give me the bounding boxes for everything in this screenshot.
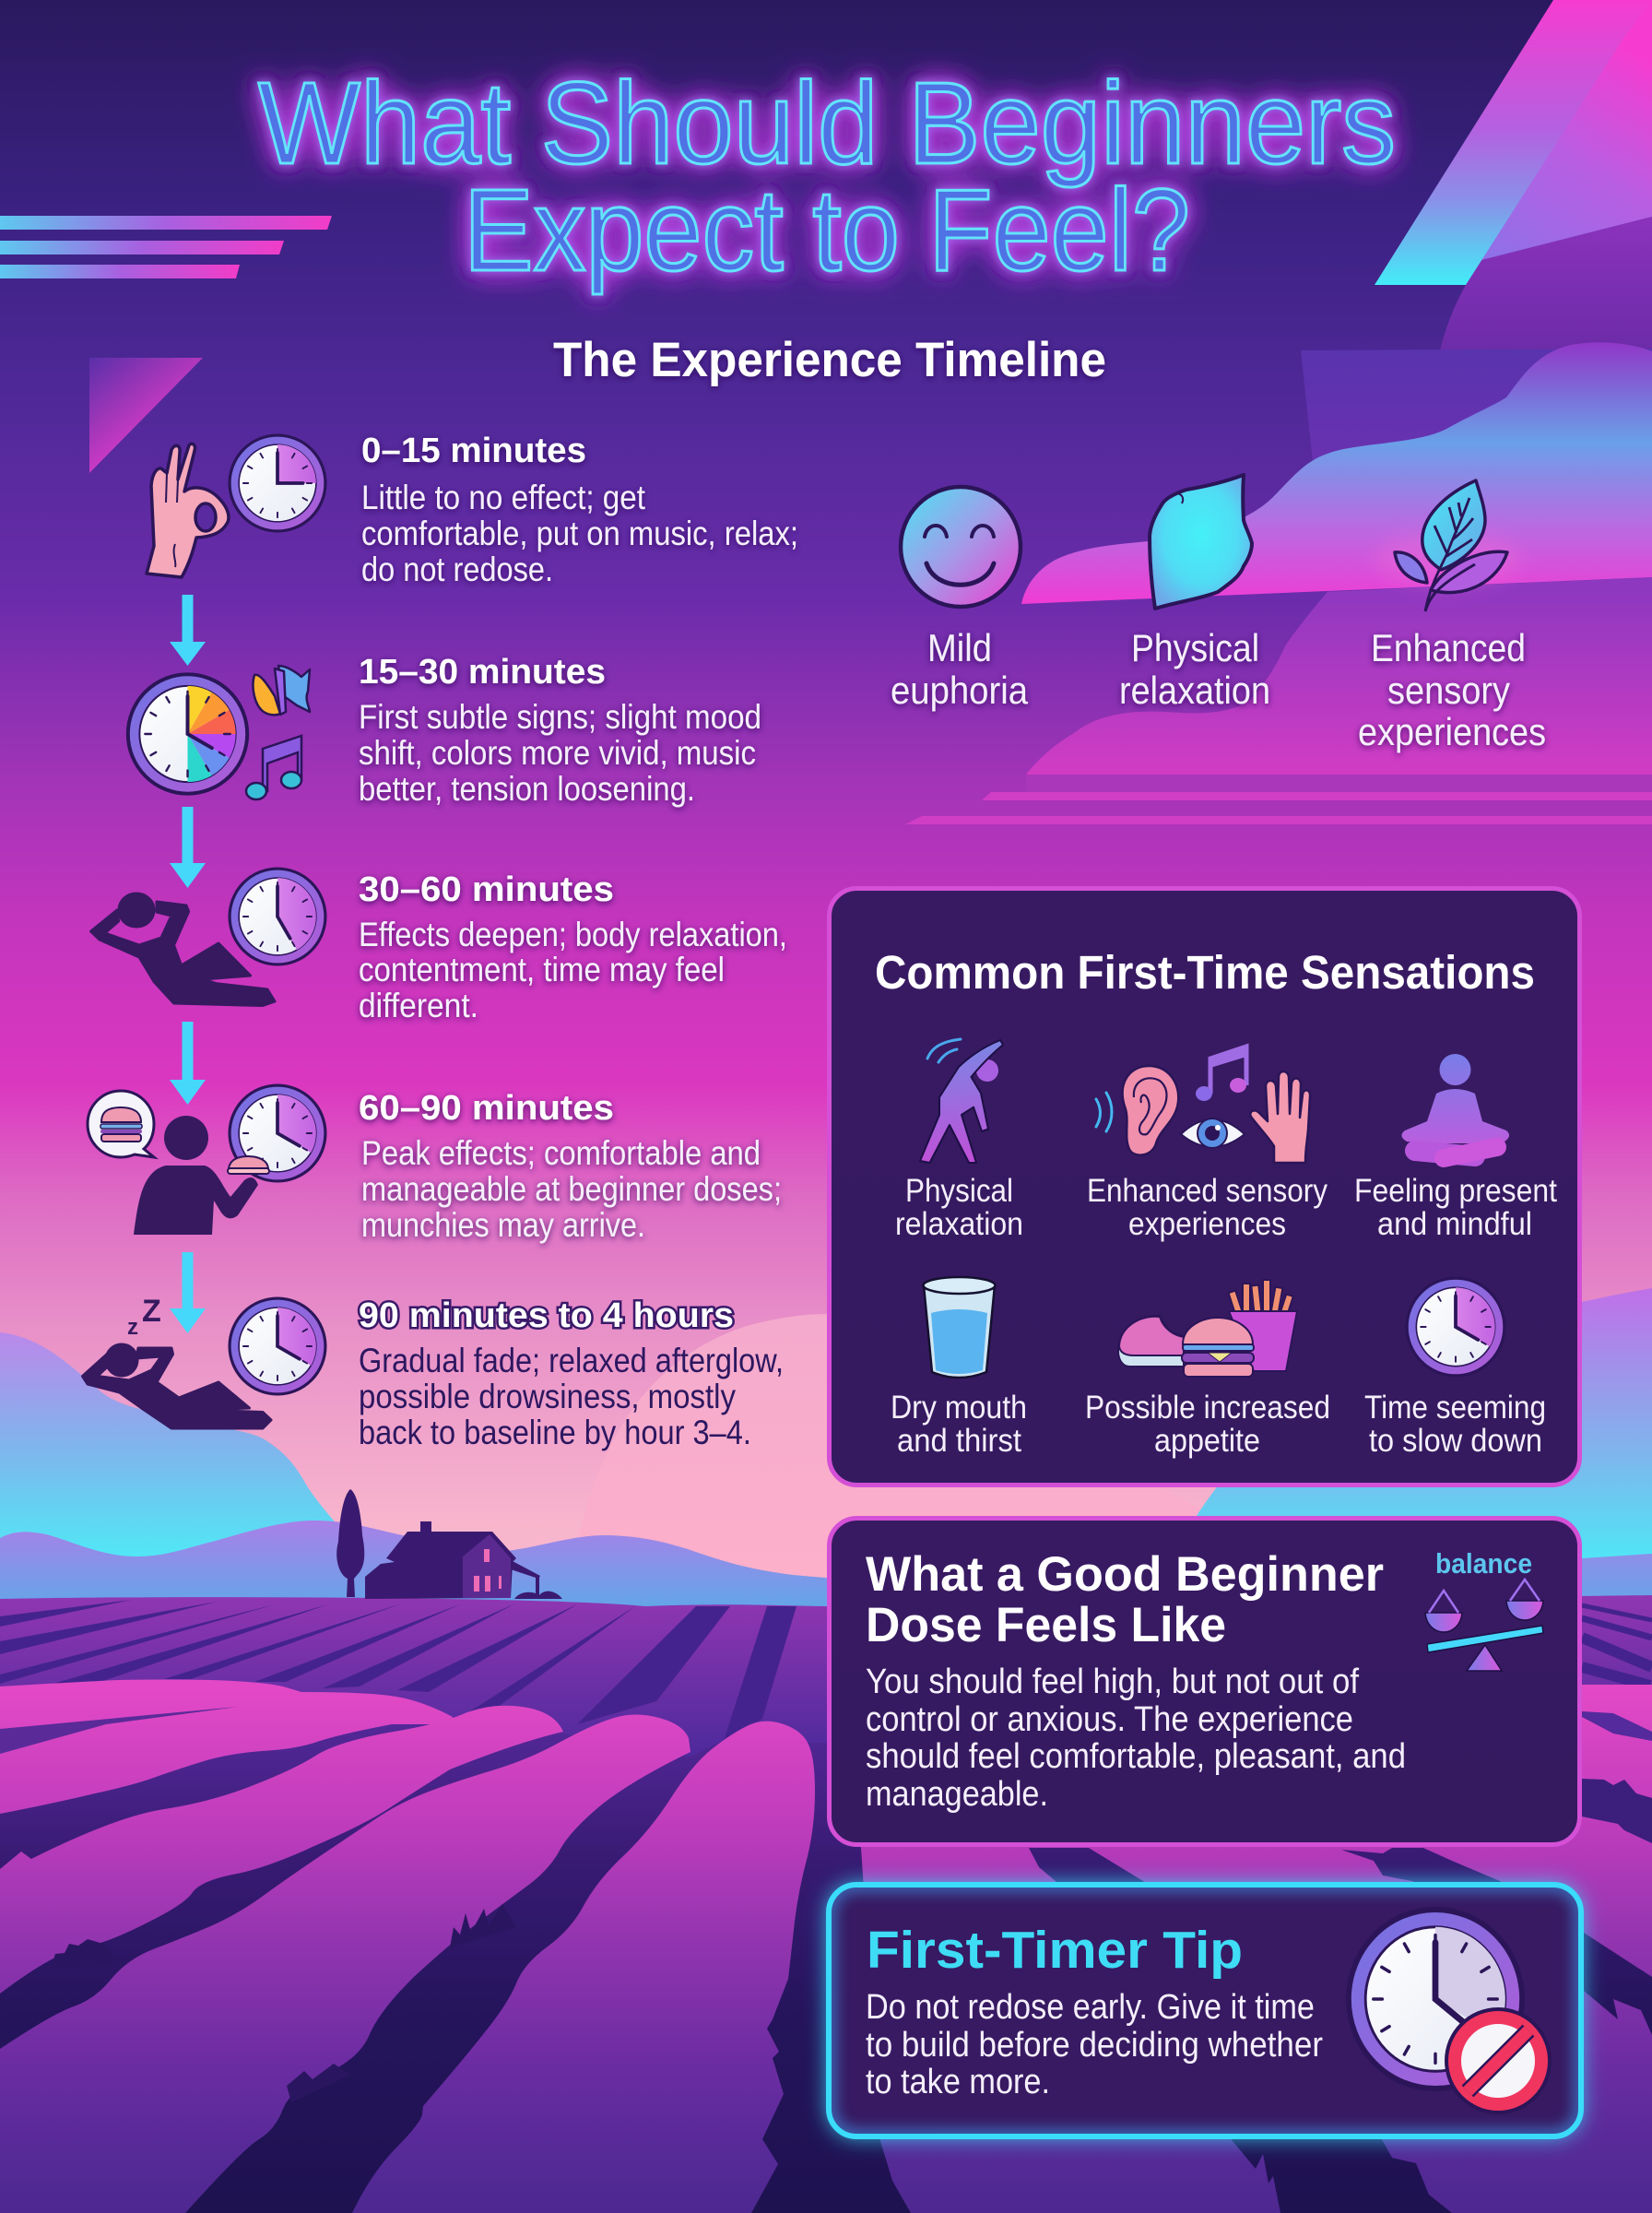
sensation labels row 2: Possible increased bbox=[1085, 1390, 1330, 1426]
effect labels: relaxation bbox=[1119, 669, 1270, 712]
icon: balance scale bbox=[1425, 1580, 1543, 1671]
timeline step 3 text bbox=[359, 870, 787, 1024]
icon: person at peak bbox=[134, 1116, 258, 1235]
icon: clock 90+ bbox=[230, 1298, 325, 1394]
timeline step 5 icons bbox=[83, 1294, 325, 1428]
effect labels: Enhanced bbox=[1371, 626, 1526, 669]
icon: ok hand bbox=[147, 444, 229, 577]
effect labels: Physical bbox=[1131, 626, 1259, 669]
panel heading: First-Timer Tip bbox=[867, 1921, 1243, 1980]
icon: smiley bbox=[901, 487, 1021, 607]
panel body: You should feel high, but not out of bbox=[866, 1663, 1359, 1701]
timeline step 2 text: First subtle signs; slight mood bbox=[359, 698, 761, 736]
sensation labels row 2: Dry mouth bbox=[891, 1390, 1027, 1426]
timeline step 2 text bbox=[359, 653, 761, 808]
sensation labels row 1: Physical bbox=[905, 1173, 1013, 1209]
panel heading: Dose Feels Like bbox=[866, 1598, 1226, 1652]
arrow 3 bbox=[170, 1022, 206, 1105]
timeline step 2 text: better, tension loosening. bbox=[359, 770, 695, 808]
icon: senses bbox=[1096, 1046, 1310, 1163]
icon: zZ: z bbox=[127, 1315, 138, 1340]
effect labels: euphoria bbox=[891, 669, 1029, 712]
timeline step 4 icons bbox=[88, 1085, 325, 1235]
effect labels bbox=[891, 626, 1546, 753]
title bbox=[258, 58, 1396, 295]
icon: clock 0-15 bbox=[230, 435, 325, 531]
arrow 4 bbox=[170, 1252, 206, 1333]
sensation labels row 2: Time seeming bbox=[1364, 1390, 1546, 1426]
icon: clock 30-60 bbox=[230, 869, 325, 964]
title: What Should Beginners bbox=[258, 58, 1396, 188]
sensation labels row 1: Feeling present bbox=[1354, 1173, 1557, 1209]
timeline step 5 text: back to baseline by hour 3–4. bbox=[359, 1414, 751, 1451]
heading: The Experience Timeline: The Experience Timeline bbox=[553, 333, 1106, 387]
timeline step 3 icons bbox=[91, 869, 325, 1005]
panel heading: Common First-Time Sensations bbox=[875, 946, 1535, 999]
timeline step 1 icons bbox=[147, 435, 325, 577]
timeline step 4 text bbox=[359, 1089, 782, 1244]
sensation labels row 1 bbox=[895, 1173, 1557, 1242]
timeline step 4 text: munchies may arrive. bbox=[361, 1206, 645, 1244]
illustration: tree and farmhouse bbox=[336, 1489, 562, 1599]
title: Expect to Feel? bbox=[464, 165, 1190, 295]
effect labels: experiences bbox=[1358, 710, 1546, 753]
timeline step 3 text: Effects deepen; body relaxation, bbox=[359, 916, 787, 953]
icon: zZ: Z bbox=[142, 1294, 161, 1329]
sensation labels row 1: experiences bbox=[1128, 1206, 1286, 1242]
label: balance: balance bbox=[1435, 1547, 1532, 1580]
arrow 1 bbox=[170, 595, 206, 666]
panel heading: What a Good Beginner bbox=[866, 1547, 1384, 1602]
icon: stretching person bbox=[920, 1039, 1003, 1163]
icon: glass of water bbox=[924, 1277, 996, 1378]
timeline step 5 text: possible drowsiness, mostly bbox=[359, 1378, 736, 1415]
sensation labels row 2: appetite bbox=[1154, 1423, 1260, 1459]
icon: food bbox=[1118, 1280, 1297, 1377]
panel body: to take more. bbox=[866, 2063, 1050, 2101]
icon: music notes bbox=[246, 736, 301, 799]
timeline step 4 text: 60–90 minutes bbox=[359, 1089, 614, 1128]
sensation labels row 2: to slow down bbox=[1369, 1423, 1542, 1459]
panel body: should feel comfortable, pleasant, and bbox=[866, 1737, 1406, 1776]
timeline step 1 text: do not redose. bbox=[361, 550, 553, 588]
background: hills, sunset mounds bbox=[0, 1288, 1652, 1623]
timeline step 5 text: Gradual fade; relaxed afterglow, bbox=[359, 1342, 784, 1379]
panel heading bbox=[866, 1547, 1384, 1652]
panel body: manageable. bbox=[866, 1775, 1048, 1814]
panel body bbox=[866, 1988, 1323, 2101]
timeline step 1 text bbox=[361, 432, 798, 588]
icon: colorful clock bbox=[128, 674, 247, 794]
panel: Common First-Time Sensations bbox=[830, 889, 1580, 1485]
sensation labels row 1: relaxation bbox=[895, 1206, 1023, 1242]
effect labels: sensory bbox=[1387, 669, 1510, 712]
timeline step 3 text: 30–60 minutes bbox=[359, 870, 614, 909]
panel: First-Timer Tip bbox=[829, 1885, 1581, 2136]
panel body: to build before deciding whether bbox=[866, 2026, 1323, 2065]
panel body: Do not redose early. Give it time bbox=[866, 1988, 1315, 2027]
timeline step 2 icons bbox=[128, 666, 310, 799]
icon: zZ bbox=[127, 1294, 161, 1340]
sensation labels row 2: and thirst bbox=[897, 1423, 1021, 1459]
timeline step 4 text: manageable at beginner doses; bbox=[361, 1170, 782, 1208]
sensation labels row 1: Enhanced sensory bbox=[1087, 1173, 1328, 1209]
timeline step 1 text: Little to no effect; get bbox=[361, 479, 646, 516]
timeline step 3 text: different. bbox=[359, 987, 478, 1024]
sensation labels row 1: and mindful bbox=[1377, 1206, 1532, 1242]
icon: speech bubble with burger bbox=[88, 1091, 154, 1157]
timeline step 1 text: 0–15 minutes bbox=[361, 432, 586, 470]
icon: meditating person bbox=[1401, 1054, 1509, 1158]
timeline step 5 text bbox=[359, 1296, 784, 1451]
effect labels: Mild bbox=[927, 626, 992, 669]
timeline step 2 text: 15–30 minutes bbox=[359, 653, 606, 692]
illustration: foreground lavender rows bbox=[0, 1680, 1652, 2213]
effects row bbox=[891, 475, 1546, 753]
icon: leaf bbox=[1375, 480, 1522, 611]
panel body bbox=[866, 1663, 1406, 1814]
illustration: distant lavender field bbox=[0, 1595, 1652, 1780]
icon: clock bbox=[1407, 1278, 1504, 1376]
panel body: control or anxious. The experience bbox=[866, 1700, 1353, 1739]
timeline step 2 text: shift, colors more vivid, music bbox=[359, 734, 756, 772]
icon: clock 60-90 bbox=[230, 1085, 325, 1181]
timeline step 1 text: comfortable, put on music, relax; bbox=[361, 515, 798, 552]
timeline step 5 text: 90 minutes to 4 hours bbox=[359, 1296, 734, 1335]
timeline step 3 text: contentment, time may feel bbox=[359, 951, 725, 988]
arrow 2 bbox=[170, 807, 206, 888]
icon: butterfly bbox=[253, 666, 310, 715]
timeline step 4 text: Peak effects; comfortable and bbox=[361, 1134, 761, 1172]
icon: pillow bbox=[1150, 475, 1252, 609]
icon: relaxing person bbox=[91, 893, 275, 1005]
icon: burger on hand bbox=[228, 1156, 269, 1174]
icon: clock with no-entry sign bbox=[1349, 1910, 1552, 2114]
icon: sleeping person bbox=[83, 1344, 271, 1428]
panel: What a Good Beginner Dose Feels Like bbox=[830, 1518, 1580, 1844]
sensation labels row 2 bbox=[891, 1390, 1546, 1459]
